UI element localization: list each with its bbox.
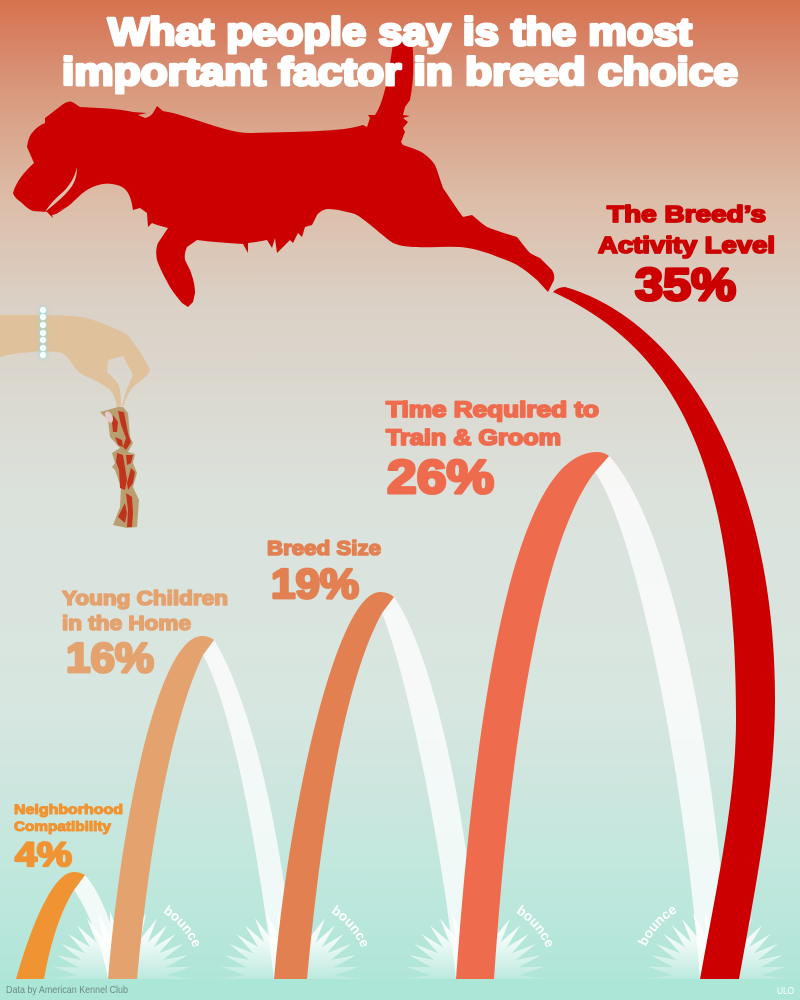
label: breed size 19%: 19% (271, 560, 359, 607)
source credit: Data by American Kennel Club (6, 984, 128, 996)
footer band (0, 979, 800, 1000)
label: neighborhood 4%: 4% (15, 836, 72, 874)
ribbon: 4% neighborhood compatibility (16, 872, 85, 979)
ribbon: 26% time to train and groom (456, 452, 609, 979)
burst: third bounce (405, 909, 545, 979)
burst: fourth bounce (647, 909, 787, 979)
white rebound arc: 19% to 26% (382, 597, 480, 979)
label: activity level 35%: The Breed’s (607, 201, 766, 227)
bacon strip (100, 407, 139, 528)
label: train and groom 26%: 26% (387, 450, 494, 503)
ribbon: 35% activity level (553, 287, 775, 979)
label: activity level 35% (598, 201, 775, 310)
burst: first bounce (52, 909, 192, 979)
bacon meat streaks (112, 411, 135, 527)
label: breed size 19%: Breed Size (267, 538, 381, 560)
ribbon: 19% breed size (274, 592, 394, 979)
mouth sliver (45, 167, 77, 212)
hand holding bacon (0, 307, 150, 528)
label: young children 16%: Young Children (62, 588, 228, 610)
label: breed size 19% (267, 538, 381, 607)
label: neighborhood 4% (14, 801, 123, 874)
pearl bracelet (40, 307, 46, 358)
label: young children 16%: 16% (66, 634, 154, 681)
bounce label 2: bounce (332, 905, 367, 947)
dog silhouette (13, 39, 554, 307)
title: What people say is the most (108, 11, 692, 54)
label: young children 16%: in the Home (62, 613, 191, 635)
label: activity level 35%: Activity Level (598, 232, 775, 258)
label: young children 16% (62, 588, 228, 681)
burst: second bounce (220, 909, 360, 979)
ribbon: 16% young children (108, 636, 214, 979)
label: activity level 35%: 35% (635, 259, 736, 310)
fingernail (103, 410, 115, 424)
label: train and groom 26%: Train & Groom (386, 425, 561, 450)
white rebound arc: 16% to 19% (203, 640, 295, 979)
title (62, 11, 738, 94)
label: train and groom 26%: Time Required to (386, 397, 599, 422)
white rebound arc: 4% to 16% (74, 875, 122, 979)
bounce label 3: bounce (516, 905, 552, 947)
author credit: ULO (777, 986, 794, 997)
hand (0, 315, 150, 408)
label: neighborhood 4%: Neighborhood (14, 801, 123, 817)
label: train and groom 26% (386, 397, 599, 503)
white rebound arc: 26% to 35% (595, 456, 730, 979)
title: important factor in breed choice (62, 51, 738, 94)
bounce label 1: bounce (164, 905, 199, 947)
bounce label 4: bounce (638, 907, 676, 946)
label: neighborhood 4%: Compatibility (14, 818, 111, 834)
